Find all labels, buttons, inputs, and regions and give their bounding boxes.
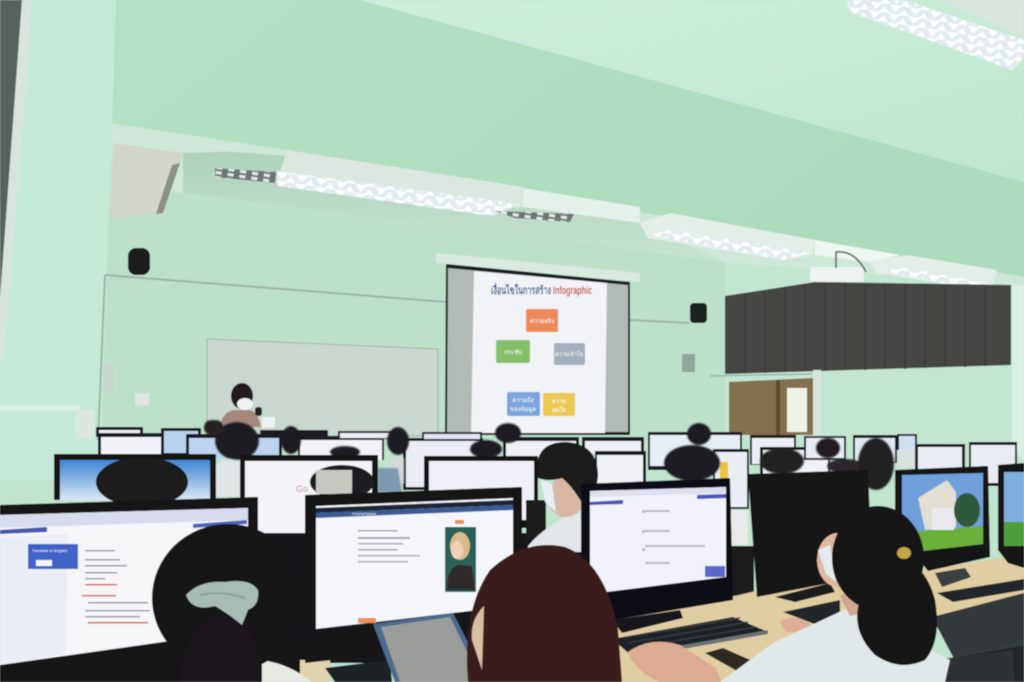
- desk: [600, 554, 1024, 682]
- middle row monitor: centre left: [240, 455, 378, 540]
- student: holding tablet: [373, 545, 622, 682]
- slide box: blue: [507, 392, 540, 416]
- document text lines: [85, 550, 150, 618]
- student: centre with mask: [528, 442, 598, 552]
- dark under-desk area: [256, 500, 754, 663]
- student: ponytail with scrunchie: [152, 524, 312, 682]
- back door: [729, 370, 821, 435]
- right column monitor: [998, 463, 1024, 568]
- translate popup: Translate to English: [32, 548, 67, 553]
- ceiling light: far right: [870, 255, 997, 288]
- slide box: grey: [554, 343, 585, 365]
- slide box: grey: ความเข้าใจ: [555, 351, 583, 358]
- desk left of centre monitor: [300, 660, 330, 682]
- front monitor: quiz page: CourseSpace: [352, 511, 377, 516]
- far row of students: [204, 420, 894, 497]
- slide box: blue: ของข้อมูล: [510, 406, 536, 413]
- phone on desk: [705, 648, 755, 671]
- office chairs: [870, 593, 1024, 682]
- monitor: chat page: [581, 478, 733, 633]
- monitor seen from behind: [748, 470, 870, 602]
- slide box: yellow: ความ: [552, 399, 566, 405]
- slide box: yellow: สดใส: [552, 406, 566, 414]
- middle row monitor: centre: [424, 456, 538, 528]
- wall switches: [103, 354, 695, 405]
- ceiling light: centre right: [640, 213, 900, 262]
- slide box: orange: [526, 309, 558, 332]
- keyboard: right: [783, 579, 1024, 625]
- ceiling light: centre left: [215, 150, 574, 222]
- keyboard: centre right: [612, 617, 768, 658]
- middle row monitor: left blue desktop: [54, 454, 216, 507]
- projection screen: [436, 253, 640, 435]
- far row of monitors: [96, 427, 1017, 509]
- quiz text lines: [358, 530, 420, 562]
- slide title: เงื่อนไขในการสร้าง Infographic: [491, 282, 592, 297]
- slide box: green: กระชับ: [504, 349, 522, 356]
- slide box: blue: ความถึง: [512, 397, 534, 404]
- air conditioner: [110, 143, 183, 218]
- presenter: [220, 383, 275, 428]
- woman portrait: [445, 527, 476, 592]
- middle row monitor: centre left: Go: [296, 484, 308, 494]
- wall rail and frame: [98, 275, 812, 440]
- translate popup: [28, 544, 78, 569]
- whiteboard: [207, 339, 438, 436]
- front monitor: quiz page: [305, 487, 522, 663]
- slide box: orange: ความจริง: [530, 318, 554, 325]
- dark acoustic curtain: [725, 282, 1011, 374]
- speakers: [128, 248, 707, 323]
- monitor with building photo: [895, 466, 990, 587]
- student: right with mask and ponytail: [628, 506, 950, 682]
- slide box: yellow: [543, 393, 575, 416]
- keyboard: front: [325, 660, 392, 682]
- ceiling light: top right: [846, 0, 1024, 70]
- front monitor: left document: [0, 497, 300, 682]
- projector: [810, 252, 866, 282]
- slide box: green: [496, 340, 530, 363]
